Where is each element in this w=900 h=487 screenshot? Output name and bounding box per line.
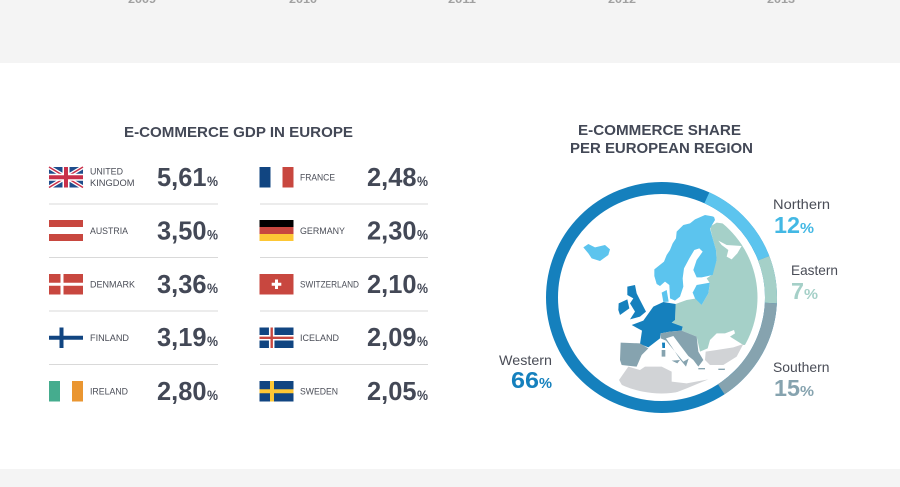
label: northern 12%: 12 xyxy=(774,212,800,238)
row: sweden xyxy=(260,376,428,406)
row: germany xyxy=(260,216,428,246)
label: eastern 7% xyxy=(791,262,838,304)
map: western region xyxy=(618,285,683,348)
row: sweden: SWEDEN xyxy=(300,386,338,398)
donut ring chart xyxy=(552,188,771,407)
label: northern 12% xyxy=(773,196,830,238)
row: sweden: 2,05 xyxy=(367,376,416,406)
row: iceland: ICELAND xyxy=(300,333,339,344)
row: austria: AUSTRIA xyxy=(90,226,129,237)
heading: e-commerce share per european region xyxy=(570,122,753,157)
row: ireland: 2,80 xyxy=(157,376,206,406)
label: western 66% xyxy=(499,352,552,393)
row: iceland: % xyxy=(417,333,428,349)
map: southern region xyxy=(620,331,725,370)
row: ireland: IRELAND xyxy=(90,386,128,398)
flag: germany xyxy=(260,220,294,241)
row: austria: % xyxy=(207,226,218,242)
flag: sweden xyxy=(260,381,294,402)
row: germany: % xyxy=(417,226,428,242)
label: western 66%: Western xyxy=(499,352,552,368)
row: france xyxy=(260,162,428,192)
row: germany: GERMANY xyxy=(300,226,346,237)
panel: gdp table xyxy=(49,162,428,406)
label: western 66%: 66 xyxy=(511,367,539,393)
label: southern 15%: Southern xyxy=(773,359,830,375)
label: northern 12%: Northern xyxy=(773,196,830,212)
row: austria xyxy=(49,216,218,246)
row: finland: % xyxy=(207,333,218,349)
label: southern 15%: % xyxy=(800,383,814,400)
label: eastern 7%: Eastern xyxy=(791,262,838,278)
top band with chart axis years xyxy=(0,0,900,63)
row: denmark xyxy=(49,269,218,299)
row: sweden: % xyxy=(417,387,428,403)
flag: switzerland xyxy=(260,274,294,294)
row: switzerland xyxy=(260,269,428,299)
row: france: 2,48 xyxy=(367,162,416,192)
map: eastern region xyxy=(672,222,758,352)
heading: e-commerce share per european region: E-COMMERCE SHARE xyxy=(578,122,741,139)
row: united kingdom: UNITED xyxy=(90,166,123,178)
row: iceland xyxy=(260,322,428,352)
row: iceland: 2,09 xyxy=(367,322,416,352)
row: switzerland: SWITZERLAND xyxy=(300,280,359,290)
flag: united kingdom xyxy=(49,167,83,188)
flag: austria xyxy=(49,220,83,241)
flag: iceland xyxy=(260,328,294,348)
row: denmark: % xyxy=(207,280,218,296)
label: western 66%: % xyxy=(539,375,552,392)
row: switzerland: % xyxy=(417,280,428,296)
map: north africa and turkey xyxy=(619,344,744,394)
row: finland xyxy=(49,322,218,352)
row: finland: FINLAND xyxy=(90,333,129,344)
heading: e-commerce share per european region: PER EUROPEAN REGION xyxy=(570,140,753,157)
label: eastern 7%: 7 xyxy=(791,278,804,304)
row: united kingdom: 5,61 xyxy=(157,162,206,192)
row: france: % xyxy=(417,173,428,189)
row: switzerland: 2,10 xyxy=(367,269,416,299)
flag: denmark xyxy=(49,274,83,294)
row: finland: 3,19 xyxy=(157,322,206,352)
row: united kingdom: % xyxy=(207,173,218,189)
map: northern region xyxy=(583,215,717,305)
row: germany: 2,30 xyxy=(367,216,416,246)
row: ireland xyxy=(49,376,218,406)
label: eastern 7%: % xyxy=(804,286,818,303)
row: austria: 3,50 xyxy=(157,216,206,246)
flag: finland xyxy=(49,328,83,348)
flag: france xyxy=(260,167,294,188)
label: northern 12%: % xyxy=(800,220,814,237)
row: denmark: 3,36 xyxy=(157,269,206,299)
label: southern 15%: 15 xyxy=(774,375,800,401)
flag: ireland xyxy=(49,381,83,402)
row: united kingdom xyxy=(49,162,218,192)
heading: e-commerce gdp in europe: E-COMMERCE GDP IN EUROPE xyxy=(124,124,353,141)
row: france: FRANCE xyxy=(300,172,335,184)
map of europe xyxy=(583,215,758,394)
row: denmark: DENMARK xyxy=(90,280,136,290)
label: southern 15% xyxy=(773,359,830,401)
bottom band xyxy=(0,469,900,487)
row: united kingdom: KINGDOM xyxy=(90,178,135,189)
row: ireland: % xyxy=(207,387,218,403)
